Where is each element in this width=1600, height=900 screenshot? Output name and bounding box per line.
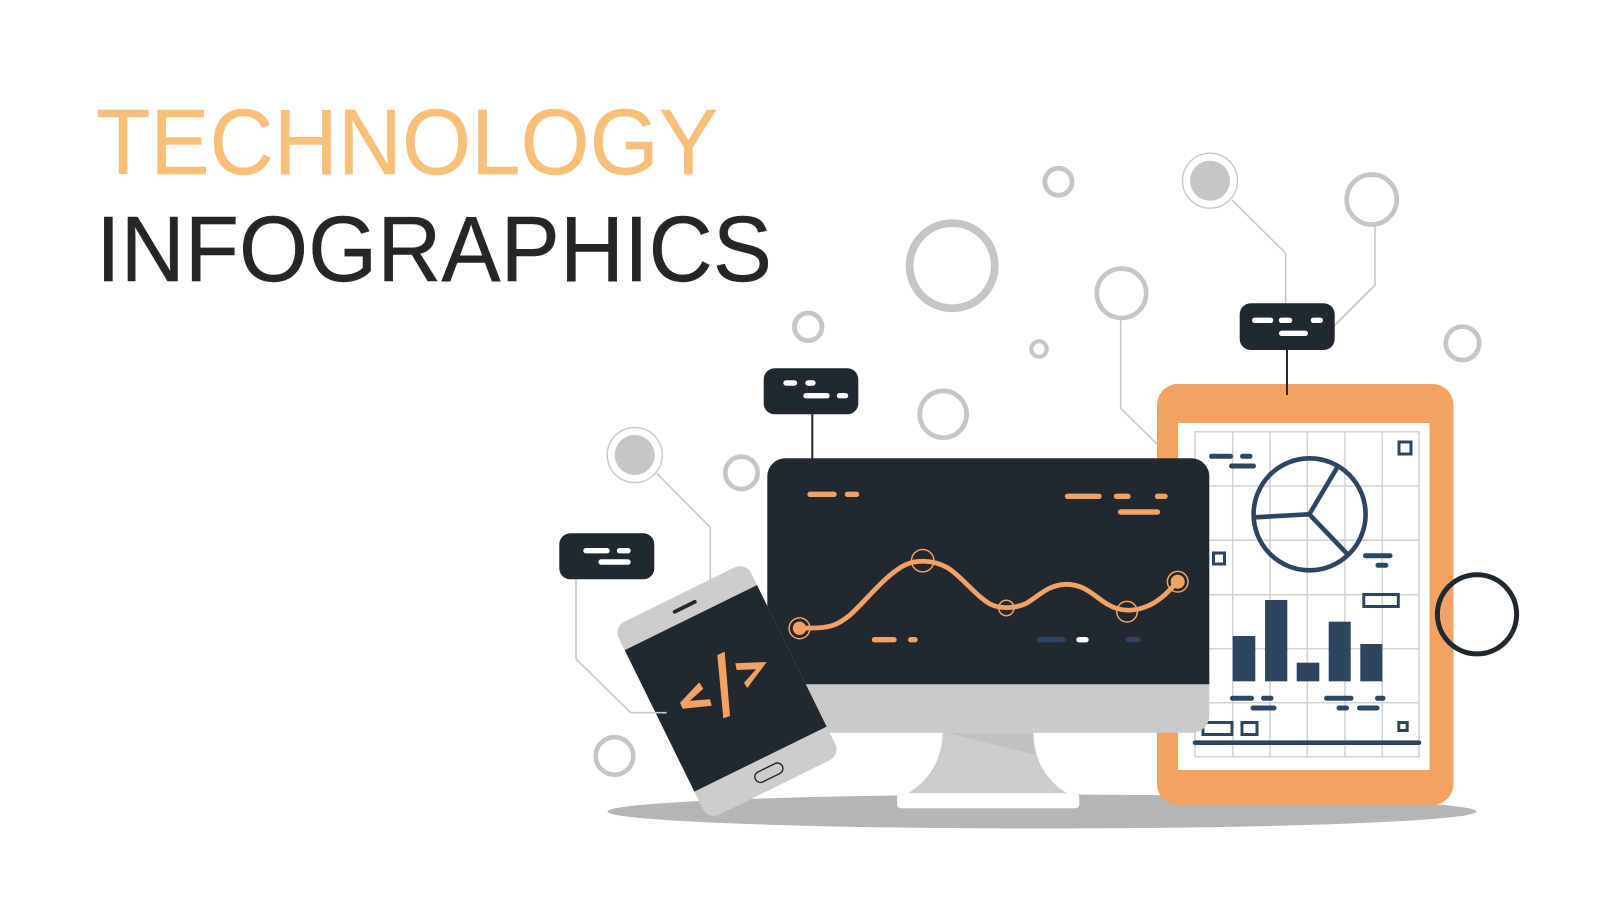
monitor stand	[907, 732, 1068, 794]
monitor	[767, 458, 1209, 808]
phone home button	[753, 761, 785, 784]
dark ring circle	[1437, 575, 1517, 654]
phone body	[613, 562, 841, 820]
tablet baseline	[1195, 740, 1419, 745]
tablet screen	[1178, 423, 1430, 770]
smartphone	[613, 562, 841, 820]
stand shade	[946, 733, 1036, 755]
grid	[1195, 432, 1419, 757]
speech bubble: left	[559, 533, 654, 579]
ground shadow	[608, 794, 1476, 828]
bar chart	[1233, 600, 1382, 681]
screen legend	[1040, 637, 1138, 642]
phone screen	[625, 585, 827, 792]
node: top filled circle	[1182, 153, 1238, 208]
title: infographics: INFOGRAPHICS	[96, 197, 772, 301]
monitor base	[897, 793, 1079, 808]
node: left filled circle	[607, 428, 662, 482]
line chart	[789, 550, 1188, 639]
connector: bubble to monitor	[811, 414, 813, 459]
tablet small boxes	[1203, 442, 1411, 734]
connector: bubble to tablet	[1286, 350, 1288, 395]
screen labels	[810, 494, 1165, 640]
connector lines	[657, 200, 1375, 583]
monitor chin	[767, 670, 1209, 733]
tablet body	[1157, 384, 1454, 805]
speech bubble: middle	[764, 368, 858, 414]
pie chart	[1254, 458, 1366, 570]
speech bubble: top right	[1240, 303, 1335, 350]
decorative ring circles	[596, 168, 1479, 775]
connector: bubble to phone	[576, 571, 667, 713]
icon: code brackets	[680, 652, 767, 718]
tablet	[1157, 384, 1454, 805]
tablet labels	[1212, 456, 1390, 708]
phone speaker	[675, 602, 695, 612]
title: technology: TECHNOLOGY	[96, 90, 718, 194]
monitor screen	[767, 458, 1209, 684]
